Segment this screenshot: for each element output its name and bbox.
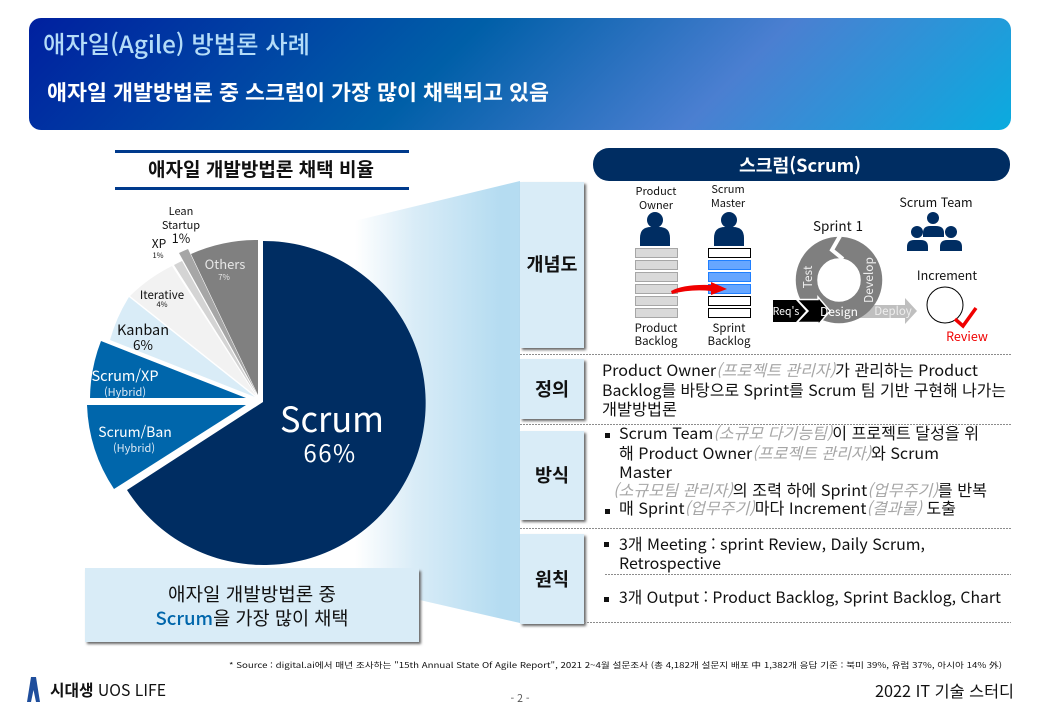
scrum section heading pill <box>593 148 1010 181</box>
scrum section heading pill: 스크럼(Scrum) <box>739 152 861 178</box>
slice: Scrum/Ban: Scrum/Ban <box>98 422 172 442</box>
slice: Lean Startup <box>162 203 257 394</box>
definition text <box>602 358 1006 420</box>
backlog labels: Backlog <box>708 333 751 349</box>
principle bullet list: 3개 Meeting : sprint Review, Daily Scrum, <box>619 532 925 555</box>
product owner role: Product <box>636 183 676 199</box>
scrum team icon <box>899 192 973 251</box>
row label: 개념도: 개념도 <box>526 251 578 277</box>
callout: scrum most adopted: 애자일 개발방법론 중 <box>168 581 336 607</box>
slice: Others: Others <box>205 254 245 273</box>
backlog labels: Sprint <box>713 320 746 336</box>
product owner role <box>636 183 676 246</box>
principle bullet list <box>604 532 1001 608</box>
slice: Others: 7% <box>218 272 231 283</box>
slice: Scrum/Ban: (Hybrid) <box>113 440 155 456</box>
method bullet list: 매 Sprint(업무주기)마다 Increment(결과물) 도출 <box>619 496 956 519</box>
row label: 원칙: 원칙 <box>535 566 569 592</box>
scrum master role: Master <box>711 195 746 211</box>
arrow: deploy <box>850 298 917 324</box>
backlog labels: Backlog <box>635 333 678 349</box>
page number: - 2 - <box>510 691 530 706</box>
scrum concept diagram <box>635 181 988 349</box>
row label: 정의 <box>520 359 586 421</box>
slice: Scrum/XP: (Hybrid) <box>104 384 146 400</box>
sprint label: Sprint 1 <box>813 215 863 235</box>
slice: Iterative: Iterative <box>140 287 184 303</box>
method bullet list: Master <box>619 460 673 483</box>
arrow: backlog selection <box>671 282 727 295</box>
slice: Lean Startup: Startup <box>162 217 200 233</box>
slice: Scrum/Ban <box>87 405 246 489</box>
scrum team icon: Scrum Team <box>899 192 973 211</box>
slice: Scrum/XP <box>90 341 246 400</box>
arrow: requirements: Req's <box>773 304 799 319</box>
product backlog stack <box>636 248 678 318</box>
backlog labels <box>635 320 751 349</box>
slice: Scrum 66%: Scrum <box>280 392 384 443</box>
callout: scrum most adopted <box>85 568 421 644</box>
arrow: design <box>797 297 858 325</box>
principle bullet list: Retrospective <box>619 551 721 574</box>
chart heading <box>115 150 409 190</box>
arrow: requirements <box>773 300 806 322</box>
definition text: Product Owner(프로젝트 관리자)가 관리하는 Product <box>602 358 978 381</box>
method bullet list <box>605 421 987 519</box>
arrow: design: Design <box>820 303 858 320</box>
method bullet list: Scrum Team(소규모 다기능팀)이 프로젝트 달성을 위 <box>619 421 979 444</box>
slice: Lean Startup: Lean <box>169 203 193 219</box>
headline message: 애자일 개발방법론 중 스크럼이 가장 많이 채택되고 있음 <box>47 77 549 107</box>
definition text: Backlog를 바탕으로 Sprint를 Scrum 팀 기반 구현해 나가는 <box>602 378 1006 401</box>
row label: 원칙 <box>520 534 586 626</box>
sprint cycle ring <box>799 236 877 312</box>
increment and review: Increment <box>917 265 977 284</box>
method bullet list: 해 Product Owner(프로젝트 관리자)와 Scrum <box>619 441 939 464</box>
slice: Kanban: 6% <box>133 334 153 354</box>
study title: 2022 IT 기술 스터디 <box>875 678 1014 702</box>
logo: 시대생 UOS LIFE: 시대생 UOS LIFE <box>50 677 166 701</box>
slice: XP: 1% <box>152 250 164 261</box>
definition text: 개발방법론 <box>602 397 677 420</box>
slice: Iterative: 4% <box>156 299 168 310</box>
arrow: deploy: Deploy <box>874 303 912 319</box>
zoom gradient connector <box>263 181 520 623</box>
slice: Scrum/XP: Scrum/XP <box>91 365 159 386</box>
slice: Lean Startup: 1% <box>172 228 191 247</box>
method bullet list: (소규모팀 관리자)의 조력 하에 Sprint(업무주기)를 반복 <box>613 478 987 501</box>
sprint backlog stack <box>708 248 750 318</box>
chart heading: 애자일 개발방법론 채택 비율 <box>148 155 374 182</box>
slice: XP <box>152 235 257 396</box>
row label: 방식: 방식 <box>535 462 569 488</box>
principle bullet list: 3개 Output : Product Backlog, Sprint Backlog, Chart <box>619 585 1001 608</box>
sprint cycle ring: Test <box>799 265 816 288</box>
slice: Scrum 66%: 66% <box>303 434 357 469</box>
source footnote: * Source : digital.ai에서 매년 조사하는 "15th Annual State Of Agile Report", 2021 2~4월 설문조사 (총 4,182개 설문지 배포 中 1,382개 응답 기준 : 북미 39%, 유럽 37%, 아시아 14% 外) <box>229 660 1002 671</box>
slice: XP: XP <box>152 235 166 252</box>
row label: 개념도 <box>520 182 586 350</box>
scrum master role <box>711 181 746 246</box>
slice: Iterative <box>130 266 256 396</box>
slice: Others <box>191 240 258 395</box>
header banner <box>29 18 1011 130</box>
pie chart: agile methodology share <box>87 203 426 565</box>
callout: scrum most adopted: Scrum을 가장 많이 채택 <box>156 605 348 631</box>
slice: Scrum 66% <box>127 241 426 565</box>
slice: Kanban: Kanban <box>117 319 169 340</box>
backlog labels: Product <box>635 320 678 336</box>
increment and review: Review <box>946 326 988 345</box>
increment and review <box>917 265 988 345</box>
product owner role: Owner <box>639 197 674 213</box>
row label: 방식 <box>520 431 586 522</box>
row label: 정의: 정의 <box>535 376 569 402</box>
slice: Kanban <box>110 297 255 397</box>
sprint cycle ring: Develop <box>860 257 877 303</box>
scrum master role: Scrum <box>711 181 745 197</box>
page title: 애자일(Agile) 방법론 사례 <box>43 25 310 60</box>
